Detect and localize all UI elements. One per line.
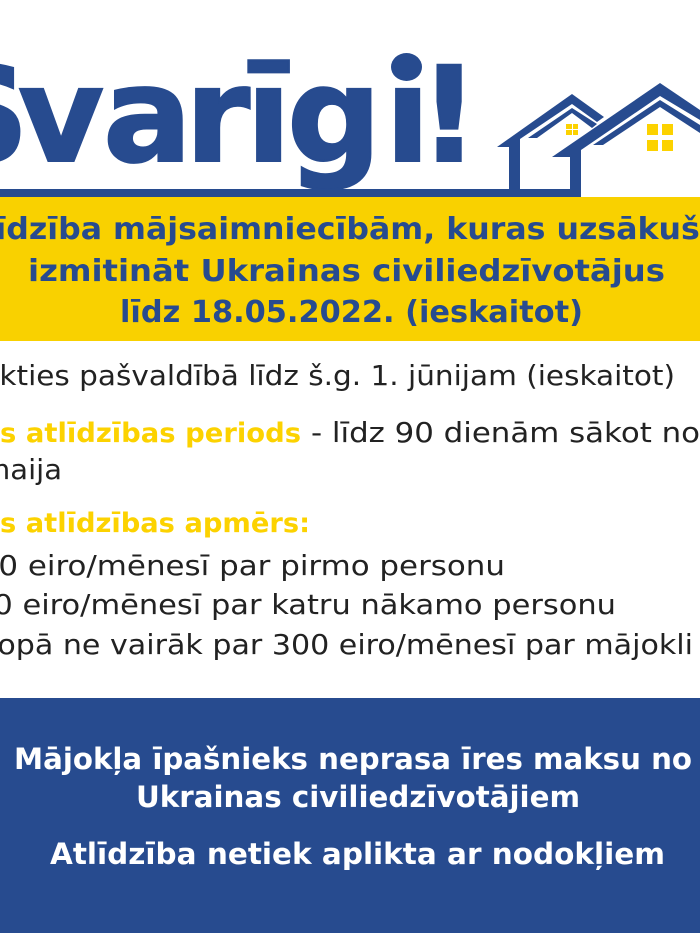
- subtitle line 3: līdz 18.05.2022. (ieskaitot): [120, 295, 583, 330]
- period value: - līdz 90 dienām sākot no: [311, 416, 700, 449]
- panel: blue footer band: [0, 698, 700, 933]
- panel: yellow subtitle band: [0, 197, 700, 341]
- footer line 2: Ukrainas civiliedzīvotājiem: [136, 780, 580, 814]
- amount line 3: kopā ne vairāk par 300 eiro/mēnesī par mājokli: [0, 628, 693, 661]
- icon: houses with ground line: [0, 83, 700, 197]
- text block: compensation amount: [0, 508, 693, 661]
- footer line 1: Mājokļa īpašnieks neprasa īres maksu no: [14, 742, 692, 776]
- footer line 3: Atlīdzība netiek aplikta ar nodokļiem: [50, 837, 665, 871]
- subtitle line 2: izmitināt Ukrainas civiliedzīvotājus: [28, 254, 665, 289]
- text block: compensation period: [0, 416, 700, 486]
- heading: amount: s atlīdzības apmērs:: [0, 508, 310, 539]
- heading: period: s atlīdzības periods: [0, 418, 301, 449]
